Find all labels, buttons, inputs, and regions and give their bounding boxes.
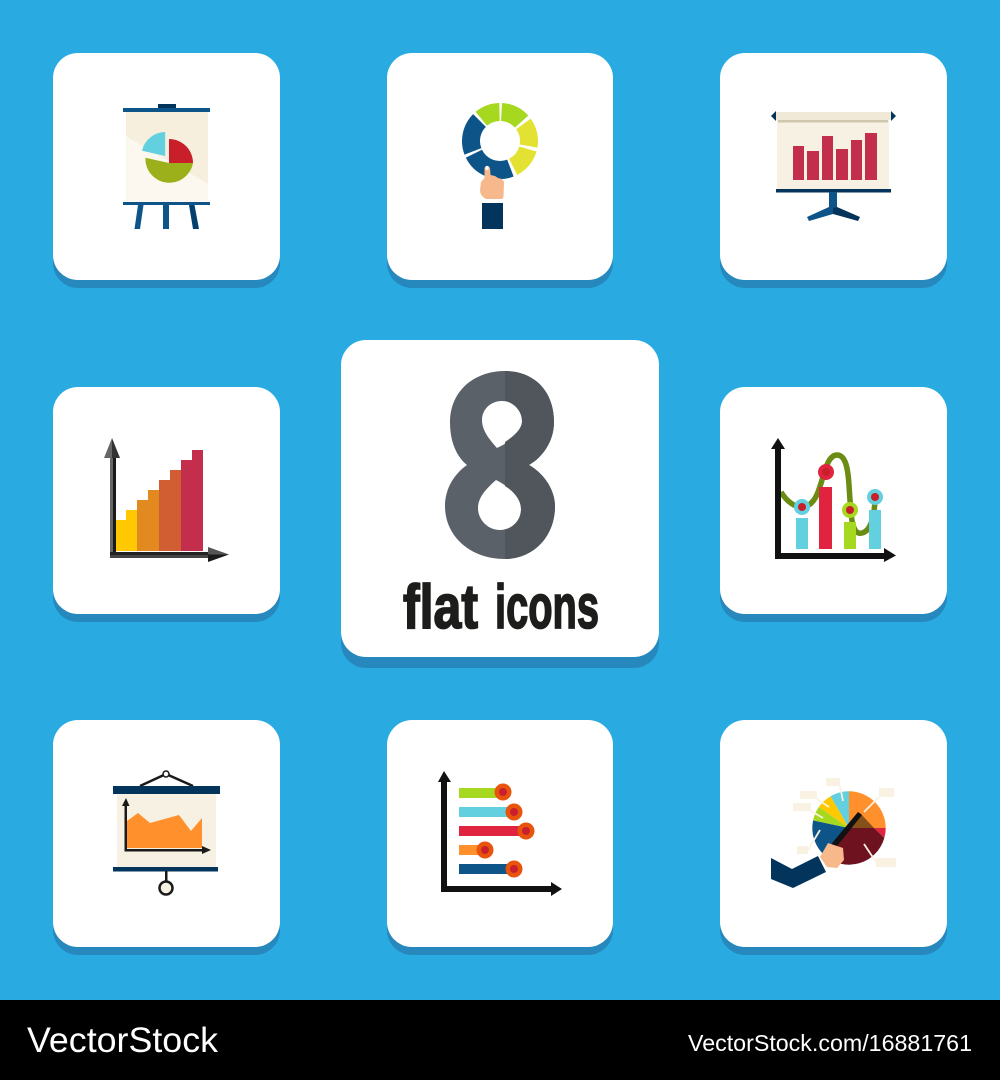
panel: card centre xyxy=(341,340,659,668)
chart: stepped bar chart with axes xyxy=(104,438,229,562)
icon: hand with pointer on pie chart xyxy=(771,778,896,888)
panel: card bottom right xyxy=(720,720,947,955)
bars xyxy=(793,133,877,180)
icon: hand pointing at donut chart xyxy=(459,100,541,229)
panel: card bottom left xyxy=(53,720,280,955)
chart: bars with curve and markers xyxy=(771,438,896,562)
footer: image url: VectorStock.com/16881761 xyxy=(688,1030,972,1056)
title: flat icons: flat xyxy=(403,573,478,642)
panel: card top right xyxy=(720,53,947,288)
chart: horizontal bars with markers xyxy=(438,771,562,896)
footer bar xyxy=(0,1000,1000,1080)
panel: card top centre xyxy=(387,53,613,288)
panel: card middle right xyxy=(720,387,947,622)
icon: easel with pie chart xyxy=(123,104,210,229)
panel: card top left xyxy=(53,53,280,288)
panel: card bottom centre xyxy=(387,720,613,955)
title: flat icons xyxy=(403,573,599,642)
title: flat icons: icons xyxy=(495,573,599,642)
icon: projector screen with bar chart xyxy=(771,111,896,221)
callout labels xyxy=(794,778,896,866)
title: number 8 xyxy=(445,371,555,559)
icon: wall screen with area chart xyxy=(113,771,220,894)
footer: brand name: VectorStock xyxy=(27,1021,219,1060)
panel: card middle left xyxy=(53,387,280,622)
